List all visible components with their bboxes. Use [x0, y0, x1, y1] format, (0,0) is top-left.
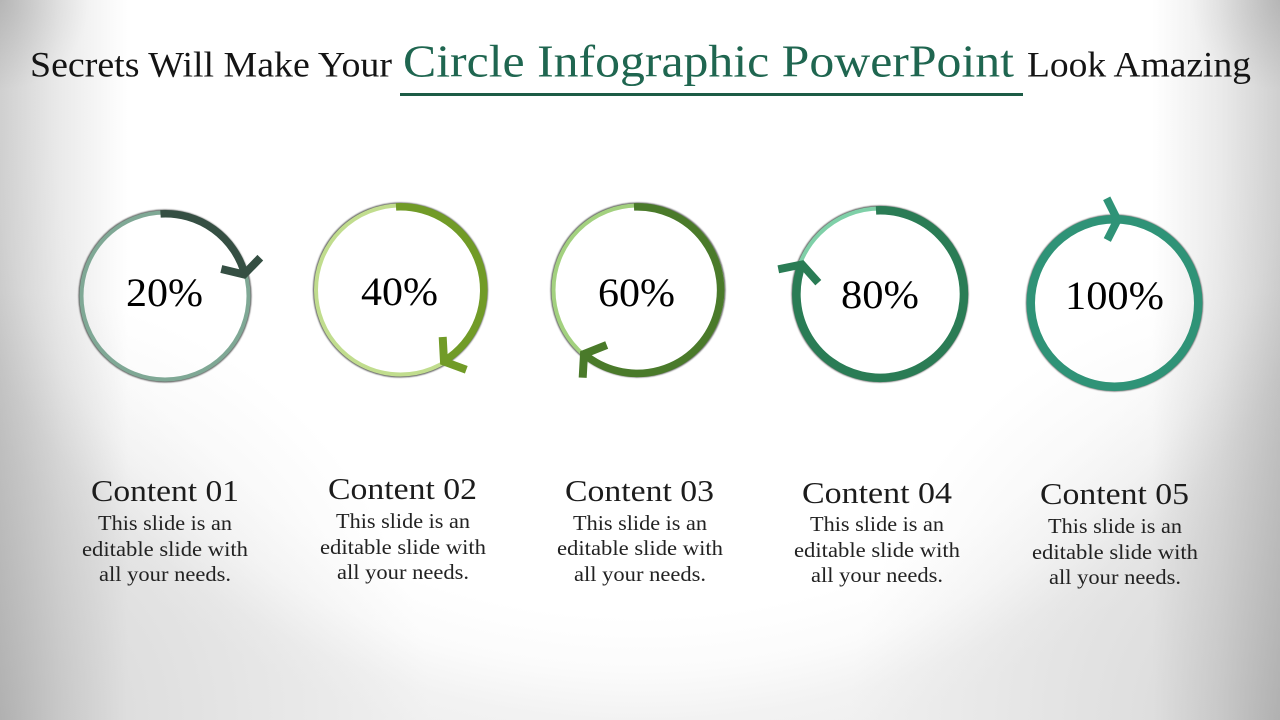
title: [30, 36, 1251, 96]
description: [1032, 514, 1199, 589]
ring: 80% progress: [793, 207, 967, 381]
percent label: 40%: [361, 269, 438, 314]
ring: 40% progress: [314, 204, 486, 376]
title: Secrets Will Make Your: [30, 44, 392, 84]
heading: Content 05: [1040, 476, 1189, 511]
arrowhead: [778, 264, 818, 283]
description: editable slide with: [557, 536, 724, 560]
description: [82, 511, 249, 586]
panel: content 01, 20%: [80, 211, 260, 586]
panel: content 05, 100%: [1028, 198, 1202, 589]
percent label: 80%: [841, 272, 919, 317]
ring: 60% progress: [552, 204, 724, 376]
description: This slide is an: [98, 511, 233, 535]
description: [557, 511, 724, 586]
heading: Content 01: [91, 473, 239, 508]
title ending: Look Amazing: [1027, 44, 1251, 84]
description: all your needs.: [811, 563, 943, 587]
panel: content 02, 40%: [314, 204, 487, 584]
arrowhead: [221, 258, 260, 274]
title highlight: Circle Infographic PowerPoint: [403, 36, 1014, 86]
percent label: 100%: [1065, 273, 1164, 318]
description: [794, 512, 961, 587]
description: all your needs.: [1049, 565, 1181, 589]
percent label: 60%: [598, 270, 675, 315]
description: editable slide with: [320, 535, 487, 559]
description: editable slide with: [794, 538, 961, 562]
heading: Content 03: [565, 473, 714, 508]
panel: content 03, 60%: [552, 204, 724, 586]
panel: content 04, 80%: [778, 207, 967, 587]
description: This slide is an: [336, 509, 471, 533]
description: This slide is an: [573, 511, 708, 535]
title underline: [400, 93, 1023, 96]
arrowhead: [443, 337, 466, 370]
description: [320, 509, 487, 584]
heading: Content 02: [328, 471, 477, 506]
ring: 100% progress: [1028, 216, 1202, 390]
description: editable slide with: [82, 537, 249, 561]
description: editable slide with: [1032, 540, 1199, 564]
description: all your needs.: [337, 560, 469, 584]
heading: Content 04: [802, 475, 953, 510]
arrowhead: [1107, 198, 1118, 240]
ring: 20% progress: [80, 211, 250, 381]
description: all your needs.: [99, 562, 231, 586]
description: all your needs.: [574, 562, 706, 586]
description: This slide is an: [810, 512, 945, 536]
description: This slide is an: [1048, 514, 1183, 538]
percent label: 20%: [126, 270, 203, 315]
arrowhead: [583, 345, 607, 378]
